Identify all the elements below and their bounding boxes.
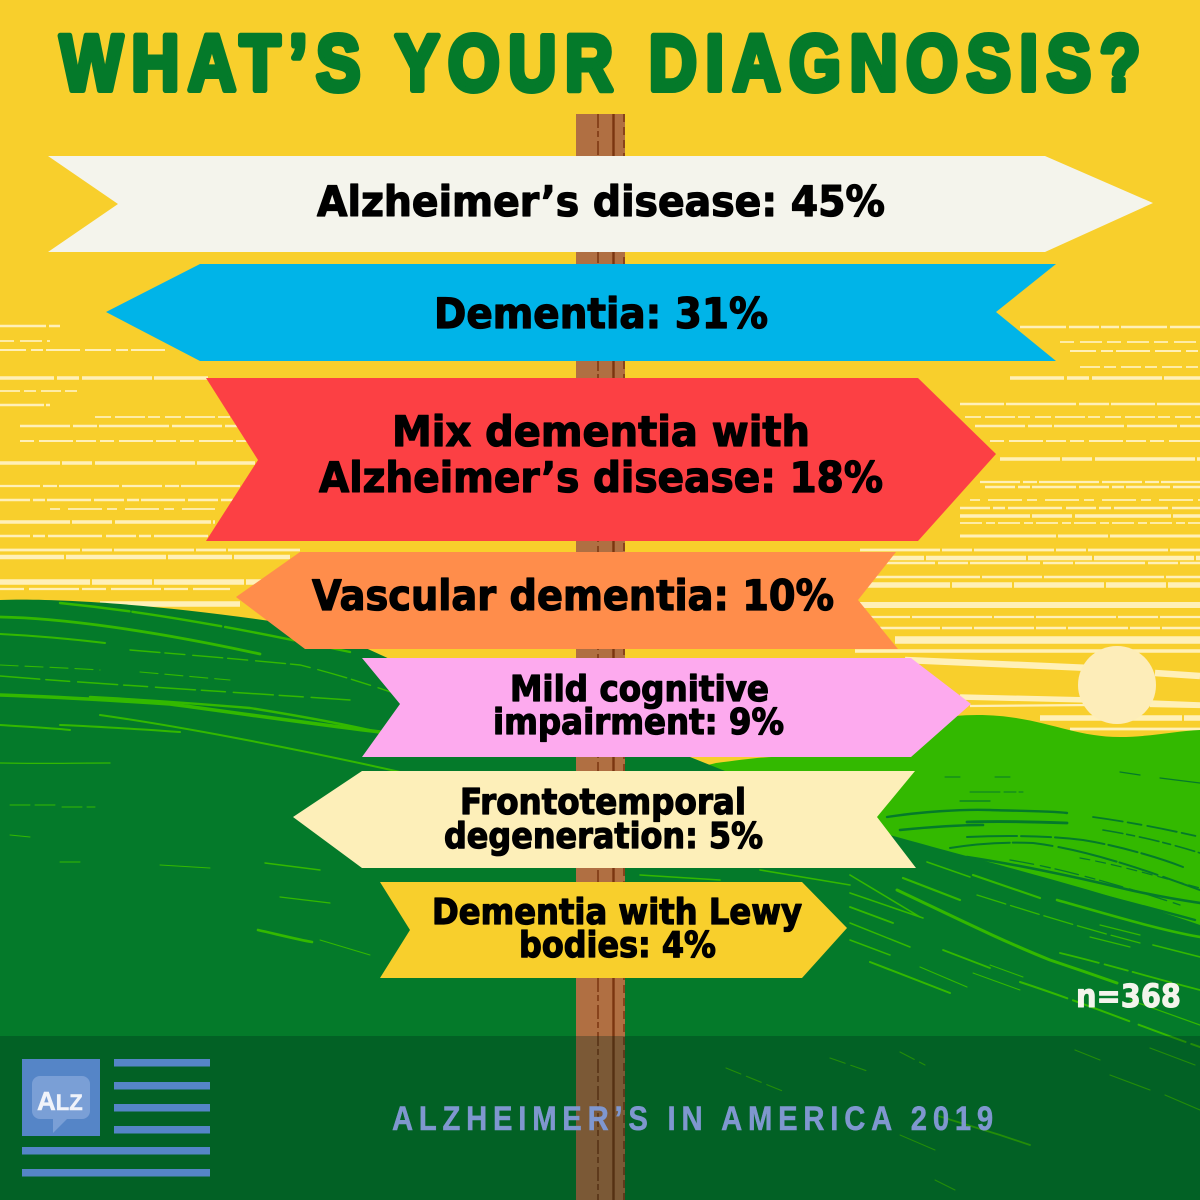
- light green hill: [680, 715, 1200, 1036]
- sign: Dementia: [106, 264, 1056, 361]
- sign: Vascular dementia: [236, 552, 898, 649]
- sun: [1078, 646, 1156, 724]
- sign: Vascular dementia: Vascular dementia: 10%: [312, 571, 834, 620]
- footer text: ALZHEIMER’S IN AMERICA 2019: [392, 1099, 993, 1138]
- sign: Dementia: Dementia: 31%: [434, 289, 768, 338]
- dark green hill: [0, 600, 1200, 1200]
- sign: Mix dementia: [206, 378, 996, 541]
- logo: Alz flag: ALZ: [37, 1086, 83, 1116]
- sign: Mild cognitive impairment: [362, 658, 971, 757]
- signpost: [576, 114, 625, 1200]
- footer band: [0, 1036, 1200, 1200]
- sign: Frontotemporal degeneration: [293, 771, 916, 868]
- dark hill grass strokes: [0, 603, 1200, 1190]
- sign: Mild cognitive impairment: Mild cognitive: [510, 669, 769, 710]
- sign: Mix dementia: Alzheimer’s disease: 18%: [319, 453, 883, 502]
- sign: Frontotemporal degeneration: degeneration: 5%: [444, 816, 763, 857]
- sign: Alzheimer's disease: [48, 156, 1153, 252]
- sign: Alzheimer's disease: Alzheimer’s disease: 45%: [317, 177, 885, 226]
- sample size: n=368: [1076, 977, 1181, 1015]
- sky streaks: [0, 326, 1200, 729]
- sign: Dementia with Lewy bodies: [380, 882, 847, 978]
- sign: Mix dementia: Mix dementia with: [392, 407, 810, 456]
- sign: Frontotemporal degeneration: Frontotemporal: [460, 782, 746, 823]
- title: WHAT’S YOUR DIAGNOSIS?: [60, 20, 1140, 107]
- sign: Mild cognitive impairment: impairment: 9%: [493, 702, 784, 743]
- sign: Dementia with Lewy bodies: Dementia with Lewy: [432, 892, 802, 933]
- sign: Dementia with Lewy bodies: bodies: 4%: [519, 925, 716, 966]
- logo: Alz flag: [22, 1059, 210, 1176]
- light hill grass strokes: [887, 772, 1200, 920]
